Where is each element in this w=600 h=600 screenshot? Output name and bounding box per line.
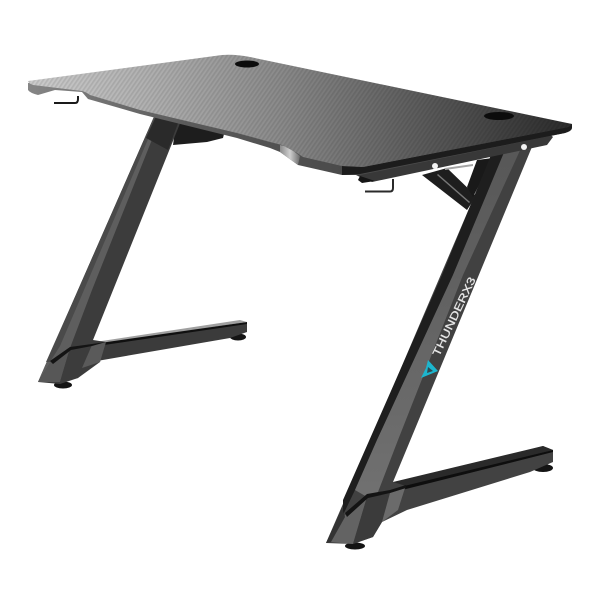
dark lip on front edge: [342, 124, 572, 175]
left foot pads: [54, 334, 246, 388]
right foot pads: [345, 464, 553, 550]
left leg group: [38, 110, 247, 388]
desktop: [28, 55, 572, 175]
right leg group: [326, 142, 553, 550]
left upright: [38, 110, 183, 384]
left hook: [54, 96, 78, 103]
rivets: [432, 144, 527, 169]
carbon fibre surface: [28, 55, 572, 167]
right cross brace: [422, 158, 493, 210]
carbon texture: [28, 55, 572, 167]
front apron under desktop: [342, 130, 553, 192]
cable grommets: [235, 60, 514, 120]
right base bar: [382, 446, 553, 522]
left base bar: [82, 320, 247, 368]
right hook: [365, 179, 393, 192]
light facet: [355, 146, 522, 497]
logo mark: [421, 360, 438, 378]
dark strip: [343, 150, 506, 515]
desktop edge: [28, 83, 572, 175]
brand wordmark: THUNDERX3: [431, 275, 479, 358]
right upright: [326, 142, 534, 544]
chamfer highlight: [280, 145, 300, 165]
left under-desk bracket: [173, 110, 226, 145]
